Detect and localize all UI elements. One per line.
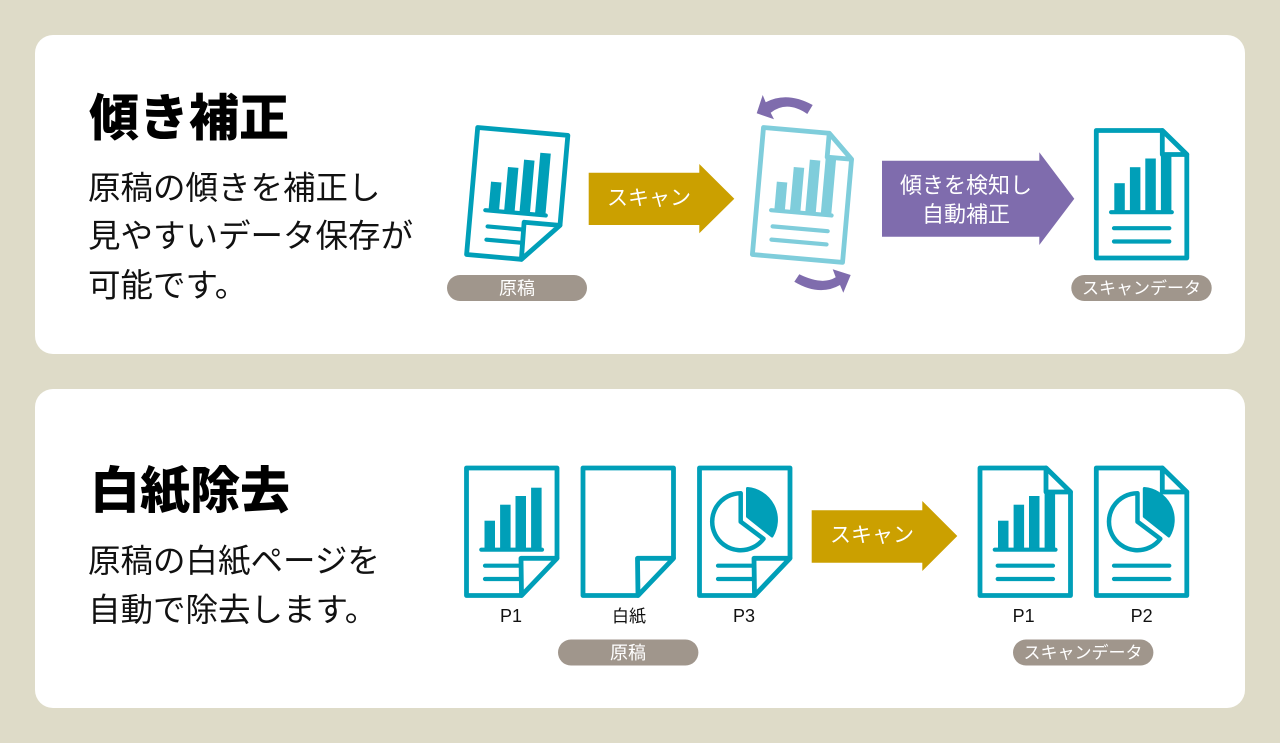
label pill: original: 原稿 bbox=[610, 639, 646, 665]
arrow: detect skew and auto-correct: 傾きを検知し bbox=[900, 168, 1032, 200]
icon: rotation arrow top bbox=[757, 95, 813, 119]
icon: corrected scanned document bbox=[1096, 130, 1187, 258]
label pill: original bbox=[558, 639, 698, 666]
icon: rotation arrow bottom bbox=[794, 269, 851, 293]
label: P3: P3 bbox=[733, 606, 755, 626]
icon: tilted scanned document bbox=[752, 128, 854, 262]
text block: blank page removal description: 原稿の白紙ページを bbox=[88, 535, 380, 582]
icon: original blank page bbox=[583, 468, 674, 596]
panel: skew correction bbox=[35, 35, 1245, 354]
text block: skew correction description: 見やすいデータ保存が bbox=[88, 210, 413, 257]
arrow: detect skew and auto-correct: 自動補正 bbox=[922, 197, 1010, 229]
label: P1: P1 bbox=[500, 606, 522, 626]
text block: skew correction description: 原稿の傾きを補正し bbox=[88, 162, 381, 209]
label pill: scan data: スキャンデータ bbox=[1082, 274, 1201, 299]
label: scanned P2: P2 bbox=[1131, 606, 1153, 626]
label pill: original bbox=[447, 274, 587, 301]
arrow: scan: スキャン bbox=[607, 182, 691, 212]
text block: blank page removal description: 自動で除去します。 bbox=[88, 584, 377, 631]
icon: tilted original document bbox=[467, 128, 568, 262]
icon: scanned page 2 bbox=[1096, 468, 1187, 596]
label pill: original: 原稿 bbox=[499, 274, 535, 300]
text block: skew correction description: 可能です。 bbox=[88, 260, 247, 306]
icon: original page 1 bbox=[466, 468, 557, 596]
label pill: scan data: スキャンデータ bbox=[1024, 638, 1142, 664]
arrow: scan: スキャン bbox=[830, 519, 914, 549]
heading: skew correction: 傾き補正 bbox=[89, 78, 289, 150]
icon: original page 3 bbox=[700, 468, 790, 596]
panel: blank page removal bbox=[35, 389, 1245, 708]
heading: blank page removal: 白紙除去 bbox=[90, 451, 290, 523]
arrow: detect skew and auto-correct bbox=[882, 152, 1074, 245]
label: blank page: 白紙 bbox=[612, 602, 646, 627]
arrow: scan bbox=[812, 501, 957, 571]
label: scanned P1: P1 bbox=[1013, 606, 1035, 626]
arrow: scan bbox=[589, 164, 734, 233]
icon: scanned page 1 bbox=[980, 468, 1070, 596]
